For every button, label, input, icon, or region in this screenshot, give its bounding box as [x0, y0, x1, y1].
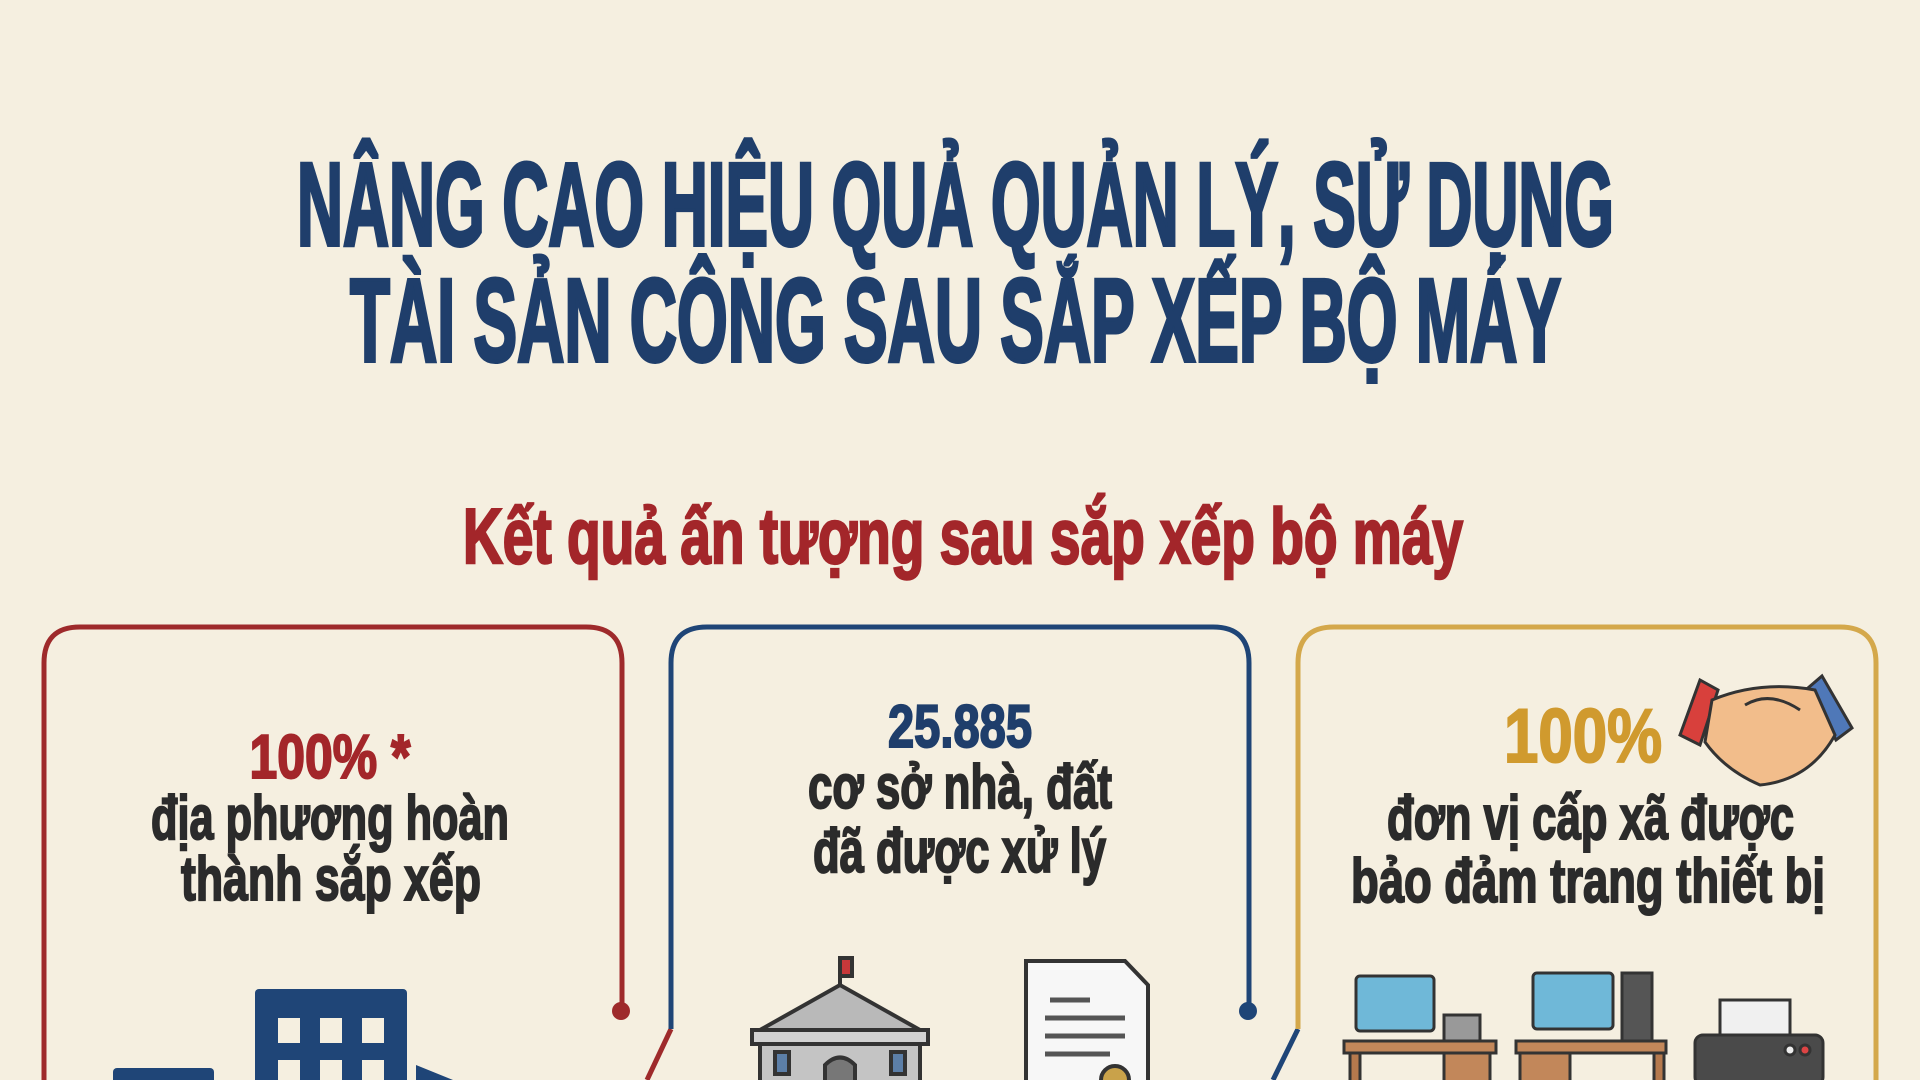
stat: 100% localities: 100% * — [250, 723, 411, 792]
icon: government building — [752, 958, 928, 1080]
panel: properties — [671, 627, 1298, 1080]
text: properties: đã được xử lý — [813, 817, 1106, 886]
text: properties — [808, 753, 1112, 886]
icon: desks with computers — [1344, 973, 1666, 1080]
text: properties: cơ sở nhà, đất — [808, 753, 1112, 822]
icon: printer — [1695, 1000, 1823, 1080]
text: localities: địa phương hoàn — [151, 784, 509, 853]
text: localities: thành sắp xếp — [181, 845, 481, 914]
stat: 100% equipment: 100% — [1504, 694, 1662, 779]
panel: localities — [44, 627, 671, 1080]
icon: handshake — [1680, 676, 1852, 785]
text: localities — [151, 784, 509, 914]
panel: equipment — [1298, 627, 1876, 1080]
icon: office buildings — [113, 989, 453, 1080]
title — [297, 138, 1614, 387]
stat: 25.885: 25.885 — [888, 693, 1032, 760]
icon: document — [1026, 961, 1148, 1080]
text: equipment — [1351, 784, 1825, 916]
subtitle: Kết quả ấn tượng sau sắp xếp bộ máy — [463, 492, 1463, 580]
